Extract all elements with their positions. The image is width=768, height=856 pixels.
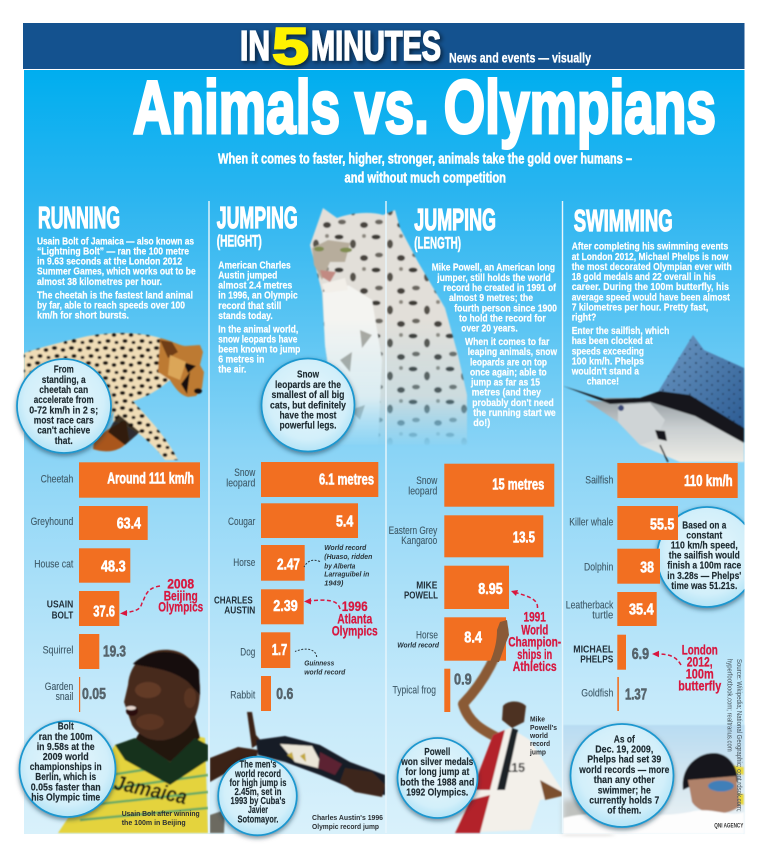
text: Austin and snow leopard: been known to jump — [218, 344, 300, 356]
callout: cheetah acceleration: most race cars — [34, 414, 94, 426]
note: Guinness world record: Guinness — [304, 659, 334, 668]
text: Austin and snow leopard: the air. — [218, 364, 246, 376]
text: sources — [726, 659, 744, 812]
bar chart: jump heights: 0.6 — [276, 686, 293, 703]
text: Austin and snow leopard — [218, 259, 300, 376]
photo detail: Powell's raised hand — [490, 620, 509, 662]
callout: Bolt's 2009 record — [20, 721, 116, 817]
callout: sailfish 100m time: 110 km/h speed, — [671, 540, 738, 552]
annotation: 2008 Beijing Olympics: Olympics — [158, 599, 203, 615]
text: Powell and snow leopard: metres (and they — [472, 387, 541, 399]
text: Powell and snow leopard: record he created in 1991 of — [443, 282, 556, 294]
callout: Phelps world records: swimmer; he — [598, 784, 651, 796]
text: Austin and snow leopard: In the animal world, — [218, 323, 298, 335]
callout: Powell silver medals: both the 1988 and — [400, 776, 474, 788]
photo: Usain Bolt — [58, 650, 208, 833]
text: Powell and snow leopard: do!) — [473, 417, 490, 429]
caption: Austin photo — [312, 813, 383, 831]
annotation: London 2012, 100m butterfly: 100m — [686, 665, 714, 681]
photo: Mike Powell long jump — [455, 630, 562, 833]
callout: Bolt's 2009 record: Bolt — [58, 721, 74, 733]
callout: high jump world record: for high jump is — [230, 777, 287, 789]
caption: Austin photo: Charles Austin's 1996 — [312, 813, 383, 822]
text: Powell and snow leopard — [432, 262, 558, 429]
bar chart: jump lengths: Eastern Grey — [389, 525, 438, 537]
callout: Powell silver medals: for long jump at — [405, 766, 470, 778]
bar chart: jump lengths: Snow — [416, 475, 437, 487]
text: sources: hyperfootbook.com; realtranus.com — [726, 659, 734, 752]
bar chart: jump heights: CHARLES — [214, 595, 253, 607]
bar chart: jump heights: 2.47 — [277, 556, 300, 573]
text: Austin and snow leopard: Austin jumped — [218, 269, 277, 281]
callout: high jump world record: Javier — [248, 804, 268, 816]
callout: Bolt's 2009 record: his Olympic time — [31, 791, 100, 803]
text: Phelps and sailfish: chance! — [587, 376, 619, 388]
text: Phelps and sailfish: right? — [572, 312, 596, 324]
text: Bolt and cheetah: Usain Bolt of Jamaica — also known as — [37, 236, 194, 248]
bar chart: jump heights: Horse — [233, 557, 255, 569]
callout: cheetah acceleration: can't achieve — [37, 425, 90, 437]
note: horse world record: (Huaso, ridden — [324, 552, 373, 561]
callout: Powell silver medals: Powell — [424, 746, 450, 758]
callout: Bolt's 2009 record: Berlin, which is — [35, 771, 96, 783]
text: Austin and snow leopard: snow leopards have — [218, 333, 297, 345]
callout: Phelps world records — [570, 724, 674, 827]
text: Phelps and sailfish: 100 km/h. Phelps — [572, 355, 644, 367]
heading: jumping length — [414, 202, 496, 252]
callout: Powell silver medals: won silver medals — [401, 756, 473, 768]
callout: snow leopard legs: cats, but definitely — [270, 399, 346, 411]
heading: jumping height — [217, 200, 298, 251]
heading: jumping height: JUMPING — [217, 200, 298, 235]
bar chart: jump lengths: World record — [397, 641, 439, 650]
bar chart: jump lengths: 13.5 — [513, 530, 535, 547]
text: Powell and snow leopard: When it comes to far — [465, 336, 549, 348]
callout: Bolt's 2009 record: championships in — [30, 761, 102, 773]
bar chart: swimming speeds: MICHAEL — [573, 643, 614, 655]
annotation: London 2012, 100m butterfly: 2012, — [687, 654, 713, 670]
text: sources: Source: Wikipedia; National Geographic; cont.rdsok.com; — [735, 659, 744, 812]
callout: cheetah acceleration — [17, 359, 111, 453]
callout: Phelps world records: world records — more — [578, 764, 669, 776]
bar chart: running speeds: 48.3 — [101, 559, 126, 576]
column dividers — [209, 201, 562, 833]
bar chart: swimming speeds: 1.37 — [625, 686, 647, 703]
callout: sailfish 100m time: time was 51.21s. — [671, 580, 737, 592]
bar chart: swimming speeds: Killer whale — [569, 517, 613, 529]
panel: running — [17, 200, 203, 827]
text: Phelps and sailfish: has been clocked at — [572, 335, 653, 347]
note: horse world record — [304, 543, 373, 588]
photo: sailfish — [563, 335, 744, 462]
text: Bolt and cheetah — [37, 236, 196, 322]
caption: Bolt photo — [122, 809, 200, 827]
text: Powell and snow leopard: jump as far as 15 — [470, 377, 540, 389]
bar chart: jump heights: 5.4 — [336, 514, 353, 531]
bar chart: running speeds: 63.4 — [117, 515, 141, 532]
bar chart: jump heights — [214, 462, 378, 711]
text: Austin and snow leopard: record that still — [218, 300, 281, 312]
photo: Charles Austin high jump — [210, 712, 385, 833]
callout: high jump world record: Sotomayor. — [238, 813, 279, 825]
annotation: 1996 Atlanta Olympics: 1996 — [342, 598, 368, 614]
text: Phelps and sailfish: 7 kilometres per hour. Pretty fast, — [572, 301, 708, 313]
text: Bolt and cheetah: The cheetah is the fastest land animal — [37, 289, 193, 301]
callout: sailfish 100m time: constant — [686, 529, 723, 541]
text: Powell and snow leopard: almost 9 metres; the — [449, 292, 533, 304]
bar chart: jump lengths: 15 metres — [492, 476, 544, 493]
text: Bolt and cheetah: in 9.63 seconds at the London 2012 — [37, 256, 182, 268]
bar chart: jump lengths — [389, 464, 554, 712]
bar chart: jump lengths: Horse — [416, 629, 438, 641]
bar chart: running speeds: Garden — [45, 681, 73, 693]
callout: snow leopard legs: smallest of all big — [272, 389, 344, 401]
text: Bolt and cheetah: “Lightning Bolt” — ran the 100 metre — [37, 246, 189, 258]
annotation: 1991 World Championships: Athletics — [513, 658, 557, 674]
bar chart: jump heights: 1.7 — [272, 642, 287, 659]
heading: swimming: SWIMMING — [574, 203, 673, 238]
bar chart: jump lengths: 8.95 — [478, 581, 503, 598]
annotation: 2008 Beijing Olympics: 2008 — [167, 575, 194, 591]
callout: Phelps world records: than any other — [594, 774, 655, 786]
text: Powell and snow leopard: the running start we — [473, 407, 556, 419]
text: Phelps and sailfish: Enter the sailfish, which — [572, 325, 669, 337]
caption: Powell photo: world — [529, 731, 548, 740]
annotation: London 2012, 100m butterfly: London — [682, 641, 718, 657]
text: Bolt and cheetah: almost 38 kilometres per hour. — [37, 276, 162, 288]
text: Powell and snow leopard: leopards are on top — [470, 356, 547, 368]
caption: Bolt photo: the 100m in Beijing — [122, 818, 186, 827]
subtitle: When it comes to faster, higher, stronger, animals take the gold over humans – — [218, 152, 632, 168]
text: Austin and snow leopard: American Charles — [218, 259, 291, 271]
text: Bolt and cheetah: Summer Games, which works out to be — [37, 266, 196, 278]
bar chart: running speeds: House cat — [34, 558, 73, 570]
callout: Bolt's 2009 record: 2009 world — [43, 751, 89, 763]
annotation: London 2012, 100m butterfly: butterfly — [678, 678, 721, 694]
text: Bolt and cheetah: km/h for short bursts. — [37, 310, 129, 322]
logo: In 5 Minutes: 5 — [272, 18, 309, 76]
callout: sailfish 100m time: the sailfish would — [669, 550, 740, 562]
bar chart: swimming speeds: Sailfish — [585, 474, 613, 486]
bar chart: jump heights: 6.1 metres — [319, 471, 374, 488]
caption: Powell photo: Powell's — [530, 723, 557, 732]
text: Austin and snow leopard: almost 2.4 metres — [218, 280, 292, 292]
bar chart: swimming speeds: turtle — [592, 610, 613, 622]
callout: Bolt's 2009 record: 0.05s faster than — [31, 781, 101, 793]
annotation: 1996 Atlanta Olympics: Atlanta — [337, 610, 372, 626]
bar chart: running speeds: 0.05 — [82, 686, 106, 703]
bar chart: jump lengths: leopard — [408, 485, 437, 497]
logo: In 5 Minutes: IN — [240, 22, 270, 69]
credit: QNI Agency: QNI AGENCY — [714, 823, 744, 830]
bar chart: swimming speeds: Goldfish — [581, 688, 613, 700]
bar chart: running speeds — [31, 462, 200, 712]
bar chart: swimming speeds: 38 — [640, 559, 654, 576]
text: Phelps and sailfish: at London 2012, Michael Phelps is now — [572, 251, 729, 263]
bar chart: running speeds: Greyhound — [31, 516, 73, 528]
text: Phelps and sailfish: 18 gold medals and 22 overall in his — [572, 271, 716, 283]
bar chart: jump heights: Cougar — [228, 516, 256, 528]
text: Bolt and cheetah: by far, able to reach speeds over 100 — [37, 300, 185, 312]
bar chart: swimming speeds: Leatherback — [566, 600, 614, 612]
bar chart: swimming speeds: 35.4 — [629, 601, 654, 618]
note: horse world record: 1949) — [324, 579, 344, 588]
bar chart: jump lengths: Kangaroo — [401, 535, 437, 547]
bar chart: running speeds: snail — [56, 691, 73, 703]
text: Powell and snow leopard: over 20 years. — [461, 322, 518, 334]
caption: Austin photo: Olympic record jump — [312, 822, 379, 831]
text: Austin and snow leopard: stands today. — [218, 310, 273, 322]
callout: high jump world record — [218, 757, 297, 835]
text: Phelps and sailfish: the most decorated Olympian ever with — [572, 261, 732, 273]
bar chart: jump heights: AUSTIN — [224, 605, 255, 617]
bar chart: swimming speeds: 55.5 — [650, 517, 674, 534]
bar chart: running speeds: 37.6 — [93, 604, 115, 621]
text: Phelps and sailfish: wouldn't stand a — [571, 366, 639, 378]
caption: Powell photo: Mike — [530, 715, 545, 724]
callout: cheetah acceleration: accelerate from — [34, 394, 94, 406]
annotation: 2008 Beijing Olympics — [120, 575, 203, 616]
callout: sailfish 100m time: in 3.28s — Phelps' — [667, 570, 741, 582]
annotation: 1991 World Championships: ships in — [517, 646, 552, 662]
photo: Mike Powell long jump: 115 — [505, 760, 525, 775]
text: Phelps and sailfish: After completing his swimming events — [572, 241, 728, 253]
logo: In 5 Minutes: MINUTES — [311, 22, 441, 69]
bar chart: jump heights: Rabbit — [230, 690, 255, 702]
annotation: 1991 World Championships — [508, 590, 561, 674]
bar chart: running speeds: USAIN — [47, 599, 73, 611]
annotation: 2008 Beijing Olympics: Beijing — [164, 588, 198, 604]
callout: Bolt's 2009 record: in 9.58s at the — [37, 741, 95, 753]
caption: Powell photo — [529, 715, 557, 756]
text: Austin and snow leopard: in 1996, an Olympic — [218, 290, 298, 302]
heading: jumping length: (LENGTH) — [414, 233, 461, 252]
caption: Powell photo: record — [530, 739, 550, 748]
bar chart: jump lengths: POWELL — [404, 590, 438, 602]
callout: high jump world record: The men's — [240, 759, 277, 771]
text: Powell and snow leopard: leaping animals, snow — [468, 346, 558, 358]
bar chart: jump heights: 2.39 — [273, 598, 298, 615]
logo: In 5 Minutes — [240, 18, 441, 76]
bar chart: swimming speeds — [566, 463, 738, 711]
photo: Michael Phelps swimming — [563, 725, 744, 834]
subtitle: and without much competition — [344, 170, 506, 186]
text: Austin and snow leopard: 6 metres in — [218, 354, 264, 366]
bar chart: jump lengths: MIKE — [416, 579, 437, 591]
bar chart: swimming speeds: Dolphin — [584, 562, 613, 574]
callout: Bolt's 2009 record: ran the 100m — [39, 731, 93, 743]
bar chart: jump lengths: 8.4 — [464, 629, 482, 646]
text: Powell and snow leopard: jumper, still holds the world — [436, 272, 551, 284]
bar chart: running speeds: Cheetah — [41, 473, 73, 485]
callout: sailfish 100m time — [657, 507, 757, 607]
callout: sailfish 100m time: finish a 100m race — [667, 560, 741, 572]
text: Powell and snow leopard: probably don't need — [472, 397, 554, 409]
caption: Bolt photo: Usain Bolt after winning — [122, 809, 200, 818]
callout: high jump world record: 1993 by Cuba's — [230, 795, 286, 807]
callout: snow leopard legs — [262, 358, 354, 452]
bar chart: swimming speeds: PHELPS — [580, 653, 613, 665]
panel: swimming — [566, 203, 757, 830]
callout: snow leopard legs: powerful legs. — [280, 420, 337, 432]
bar chart: jump heights: Dog — [240, 647, 255, 659]
caption: Powell photo: jump — [529, 747, 546, 756]
callout: Phelps world records: currently holds 7 — [589, 794, 659, 806]
photo: snow leopard — [310, 208, 467, 445]
text: Phelps and sailfish — [571, 241, 732, 388]
bar chart: running speeds: Around 111 km/h — [107, 470, 194, 487]
bar chart: swimming speeds: 110 km/h — [684, 473, 733, 490]
text: Powell and snow leopard: Mike Powell, an American long — [432, 262, 555, 274]
callout: sailfish 100m time: Based on a — [682, 519, 726, 531]
callout: high jump world record: world record — [234, 768, 281, 780]
callout: Powell silver medals — [398, 738, 478, 818]
bar chart: swimming speeds: 6.9 — [632, 646, 649, 663]
callout: snow leopard legs: have the most — [280, 410, 337, 422]
bar chart: running speeds: 19.3 — [103, 644, 126, 661]
text: Phelps and sailfish: speeds exceeding — [572, 345, 644, 357]
bar chart: jump lengths: Typical frog — [392, 685, 436, 697]
text: Powell and snow leopard: to hold the record for — [459, 312, 546, 324]
bar chart: jump heights: Snow — [234, 467, 255, 479]
panel: jumping height — [214, 200, 383, 835]
heading: jumping length: JUMPING — [414, 202, 496, 237]
callout: snow leopard legs: leopards are the — [275, 379, 341, 391]
note: Guinness world record: world record — [304, 668, 346, 677]
annotation: 1991 World Championships: 1991 — [523, 609, 546, 625]
callout: Phelps world records: of them. — [607, 805, 641, 817]
bar chart: running speeds: Squirrel — [43, 644, 73, 656]
text: Phelps and sailfish: career. During the 100m butterfly, his — [572, 281, 729, 293]
callout: cheetah acceleration: that. — [55, 435, 73, 447]
annotation: 1996 Atlanta Olympics — [304, 598, 378, 639]
bar chart: jump lengths: 0.9 — [454, 671, 472, 688]
callout: cheetah acceleration: From — [54, 364, 74, 376]
note: horse world record: by Alberta — [324, 561, 355, 570]
annotation: 1991 World Championships: World — [521, 621, 548, 637]
text: Phelps and sailfish: average speed would have been almost — [572, 291, 730, 303]
callout: Phelps world records: As of — [614, 733, 635, 745]
annotation: 1991 World Championships: Champion- — [508, 634, 561, 650]
text: Powell and snow leopard: once again; able to — [470, 366, 547, 378]
photo: Usain Bolt: Jamaica — [112, 771, 189, 809]
tagline: News and events — visually — [449, 50, 591, 66]
callout: snow leopard legs: Snow — [297, 369, 320, 381]
note: Guinness world record — [295, 649, 346, 677]
bar chart: jump heights: leopard — [226, 478, 255, 490]
annotation: 1996 Atlanta Olympics: Olympics — [332, 623, 378, 639]
header band — [23, 18, 744, 76]
panel: jumping length — [389, 202, 561, 818]
bar chart: running speeds: BOLT — [52, 609, 74, 621]
callout: Phelps world records: Dec. 19, 2009, — [595, 744, 653, 756]
callout: Powell silver medals: 1992 Olympics. — [406, 786, 468, 798]
photo: cheetah — [24, 333, 204, 460]
callout: cheetah acceleration: standing, a — [42, 374, 86, 386]
text: Powell and snow leopard: fourth person since 1900 — [454, 302, 557, 314]
note: horse world record: Larraguibel in — [324, 570, 370, 579]
subtitle — [218, 152, 632, 186]
heading: jumping height: (HEIGHT) — [217, 232, 262, 251]
callout: cheetah acceleration: 0-72 km/h in 2 s; — [29, 404, 98, 416]
callout: cheetah acceleration: cheetah can — [39, 384, 88, 396]
heading: running: RUNNING — [38, 200, 120, 235]
callout: high jump world record: 2.45m, set in — [234, 786, 282, 798]
callout: Phelps world records: Phelps had set 39 — [587, 754, 661, 766]
note: horse world record: World record — [324, 543, 367, 552]
annotation: London 2012, 100m butterfly — [652, 641, 721, 694]
